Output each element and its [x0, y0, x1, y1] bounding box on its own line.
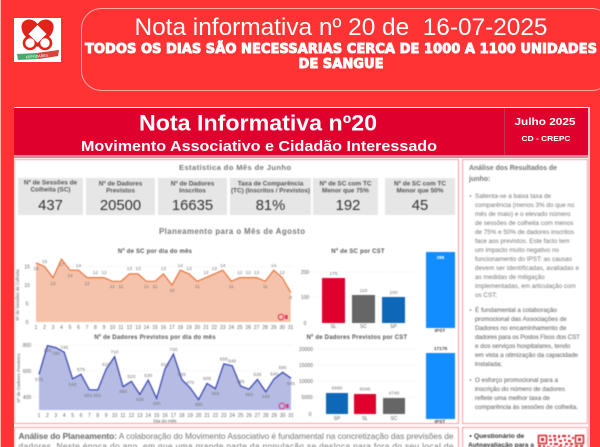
report sheet	[14, 107, 590, 447]
chart: expected donors per day: 800	[23, 343, 31, 349]
x axis: 10	[110, 325, 115, 331]
chart: expected donors per CST: 4740	[389, 390, 400, 396]
values: 505	[203, 376, 211, 382]
x axis: 15	[154, 413, 160, 419]
x axis: 24	[229, 325, 234, 331]
x axis: 11	[118, 325, 124, 331]
KPI: expected donors: 20500	[100, 198, 141, 214]
icon: marker	[278, 314, 288, 320]
chart: expected donors per CST: 0	[309, 412, 312, 418]
KPI: expected donors: Nº de Dadores	[99, 180, 143, 188]
panel: results analysis	[462, 160, 588, 424]
KPI: SC under 50%	[385, 178, 455, 215]
bullet 2: em vista a otimização da capacidade	[475, 352, 578, 359]
bullet 1: de 75% e 50% de dadores inscritos	[475, 229, 574, 236]
values: 14	[67, 273, 73, 279]
values: 13	[212, 266, 217, 272]
x axis: 1	[35, 325, 38, 331]
values: 710	[111, 350, 119, 356]
x axis: 3	[52, 325, 55, 331]
x axis: 5	[71, 413, 74, 419]
x axis: 12	[127, 325, 132, 331]
statistics heading: Estatística do Mês de Junho	[179, 163, 291, 172]
values: 11	[263, 284, 268, 290]
subtitle: TODOS OS DIAS SÃO NECESSARIAS CERCA DE 1000 A 1100 UNIDADES	[85, 40, 597, 57]
values: 12	[246, 270, 251, 276]
values: 11	[110, 284, 115, 290]
x axis: 20	[195, 325, 200, 331]
x axis: 2	[46, 413, 49, 419]
bullet 3: reflete uma melhor taxa de	[475, 395, 550, 402]
chart: SC per CST: 200	[301, 270, 309, 276]
values: 15	[42, 259, 47, 265]
icon: logo: FEPODABES	[26, 53, 49, 59]
planning heading: Planeamento para o Mês de Agosto	[159, 227, 305, 236]
bullet 1: face aos previstos. Este facto tem	[475, 238, 570, 245]
chart: SC per CST: 110	[360, 288, 368, 294]
values: 640	[228, 358, 237, 364]
chart: expected donors per day: Nº de Dadores Previstos por dia do mês	[94, 335, 216, 341]
chart: SC per day: Nº de Sessões de Colheita	[15, 269, 20, 321]
KPI: expected donors	[86, 178, 155, 215]
x axis: 25	[238, 413, 244, 419]
values: 535	[253, 372, 262, 378]
KPI: SC under 50%: Nº de SC com TC	[394, 180, 446, 188]
subtitle	[85, 40, 597, 72]
values: 14	[220, 263, 226, 269]
bullet 1: os CST;	[475, 292, 497, 299]
planning analysis text	[18, 431, 454, 447]
bullet 2: Dadores no encaminhamento de	[475, 325, 567, 332]
chart: SC per CST: SC	[360, 324, 367, 330]
x axis: 24	[229, 413, 235, 419]
bullet 1: Salienta-se a baixa taxa de	[475, 193, 551, 200]
x axis: 22	[213, 413, 218, 419]
x axis: 8	[94, 325, 97, 331]
chart: SC per CST: Nº de SC por CST	[331, 249, 385, 255]
values: 575	[77, 367, 85, 373]
date: Julho 2025	[514, 116, 576, 128]
x axis: 18	[179, 413, 185, 419]
x axis: 29	[271, 325, 277, 331]
x axis: 5	[69, 325, 72, 331]
chart: SC per day: 0	[26, 320, 29, 326]
KPI: SC under 75%: 192	[336, 198, 360, 214]
x axis: 27	[255, 413, 260, 419]
values: 11	[144, 284, 149, 290]
report subtitle: Movimento Associativo e Cidadão Interessado	[81, 138, 437, 155]
values: 440	[262, 394, 270, 400]
chart: SC per CST: 100	[301, 295, 309, 301]
values: 460	[245, 392, 253, 398]
chart: expected donors per day: 600	[23, 369, 31, 375]
bullet 3: inscrição do número de dadores	[475, 386, 565, 393]
x axis: 30	[279, 325, 285, 331]
x axis: 16	[162, 413, 168, 419]
bullet 1: devem ser identificadas, avaliadas e	[475, 265, 579, 272]
KPI: attendance rate: (TC) (Inscritos / Previstos)	[231, 188, 310, 194]
values: 14	[178, 263, 183, 269]
area and line	[36, 259, 291, 322]
chart: SC per day: Nº de SC por dia do mês	[118, 249, 193, 255]
x axis: 19	[187, 413, 193, 419]
questionnaire text	[468, 433, 534, 447]
x axis: 14	[145, 413, 151, 419]
values: 780	[52, 351, 60, 357]
x axis: 13	[135, 325, 141, 331]
x axis: 9	[103, 325, 106, 331]
bullet 1: um impacto muito negativo no	[475, 247, 560, 254]
values: 12	[93, 270, 98, 276]
chart: SC per CST: 176	[329, 271, 338, 277]
values: 730	[169, 347, 178, 353]
values: 14	[76, 263, 81, 269]
values: 8	[289, 295, 292, 301]
report header band	[14, 108, 588, 155]
values: 12	[280, 270, 285, 276]
values: 540	[69, 382, 77, 388]
values: 575	[35, 377, 43, 383]
values: 380	[195, 402, 203, 408]
x axis: 29	[271, 413, 277, 419]
area and line	[39, 346, 291, 410]
icon: logo	[14, 18, 61, 62]
x axis: 9	[105, 413, 108, 419]
header callout box	[82, 8, 600, 90]
x axis	[38, 413, 294, 419]
chart: expected donors per CST: IPST	[435, 419, 445, 425]
bullet 1: funcionamento do IPST: as causas	[475, 256, 572, 263]
KPI: sessions: 437	[38, 198, 63, 214]
values: 795	[43, 348, 52, 354]
values: 13	[127, 266, 132, 272]
bullet 3: comparência às sessões de colheita.	[475, 404, 578, 411]
x axis: 21	[204, 413, 210, 419]
KPI: SC under 75%: Menor que 75%	[322, 188, 369, 194]
x axis: 13	[137, 413, 143, 419]
values: 12	[50, 281, 56, 287]
bullet 1: as medidas de mitigação	[475, 274, 545, 281]
report title: Nota Informativa nº20	[139, 110, 377, 136]
x axis: 7	[88, 413, 91, 419]
values: 520	[127, 374, 136, 380]
KPI: SC under 75%	[313, 178, 378, 215]
values: 535	[178, 372, 186, 378]
values: 13	[161, 266, 166, 272]
KPI: attendance rate	[230, 178, 311, 215]
x axis: 27	[254, 325, 260, 331]
QR code	[538, 435, 584, 447]
values: 545	[287, 381, 295, 387]
x axis: 20	[196, 413, 202, 419]
x axis: 12	[129, 413, 134, 419]
x axis: 18	[178, 325, 183, 331]
chart: SC per day	[15, 249, 294, 331]
chart: expected donors per CST: SL	[362, 416, 368, 422]
values: 455	[84, 393, 92, 399]
x axis: 28	[263, 413, 269, 419]
x axis: 26	[246, 325, 251, 331]
bullet 3: O esforço promocional para a	[475, 377, 558, 384]
KPI: registered donors: Inscritos	[179, 188, 206, 194]
questionnaire text: Questionário de	[474, 433, 525, 440]
x axis: 26	[246, 413, 252, 419]
chart: SC per day: 10	[24, 283, 30, 289]
x axis: 23	[220, 325, 226, 331]
x axis: 16	[161, 325, 166, 331]
values: 13	[135, 266, 141, 272]
values: 480	[119, 389, 127, 395]
values: 11	[153, 284, 158, 290]
x axis: 14	[144, 325, 149, 331]
values: 11	[119, 284, 124, 290]
values: 12	[84, 281, 90, 287]
panel: planning analysis	[14, 428, 458, 447]
chart: SC per CST	[301, 249, 455, 334]
x axis: 3	[54, 413, 57, 419]
values: 615	[161, 362, 169, 368]
chart: expected donors per CST: Nº de Dadores Previstos por CST	[307, 335, 408, 341]
chart: expected donors per day: Nº de Dadores Previstos	[16, 353, 21, 403]
values: 12	[237, 270, 243, 276]
chart: SC per CST: 0	[304, 321, 307, 327]
chart: SC per day: 5	[26, 302, 29, 308]
values: 11	[195, 284, 200, 290]
icon: marker	[279, 403, 289, 409]
bullet 2: promocional das Associações de	[475, 316, 567, 323]
x axis: 17	[169, 325, 175, 331]
subtitle: DE SANGUE	[298, 56, 384, 72]
x axis: 30	[280, 413, 286, 419]
chart: expected donors per CST: 15000	[299, 363, 313, 369]
x axis: 4	[63, 413, 66, 419]
values: 11	[229, 284, 234, 290]
values: 485	[237, 379, 245, 385]
KPI: sessions: Colheita (SC)	[30, 186, 71, 194]
chart: SC per CST: IPST	[435, 328, 445, 334]
values: 465	[211, 391, 220, 397]
x axis: 6	[77, 325, 80, 331]
bullet 3	[470, 377, 578, 411]
KPI: registered donors: Nº de Dadores	[171, 180, 215, 188]
x axis: 1	[38, 413, 41, 419]
values: 455	[93, 393, 101, 399]
bullet 2: instalada;	[475, 361, 502, 368]
chart: expected donors per day: Dia do mês	[153, 418, 177, 424]
chart: expected donors per CST: 10000	[299, 379, 313, 385]
KPI: attendance rate: Taxa de Comparência	[238, 180, 304, 188]
x axis: 11	[120, 413, 126, 419]
x axis: 2	[43, 325, 46, 331]
bullet 1: implementadas, em articulação com	[475, 283, 576, 290]
values: 16	[33, 266, 39, 272]
values: 655	[220, 356, 228, 362]
planning analysis text: Análise do Planeamento: A colaboração do Movimento Associativo é fundamental na concretização das previsões de	[18, 431, 454, 441]
analysis heading: junho:	[468, 176, 490, 183]
KPI: registered donors	[158, 178, 227, 215]
bullet 1: comparência (menos 3% do que no	[475, 202, 575, 209]
chart: expected donors per CST	[299, 335, 455, 425]
x axis: 6	[80, 413, 83, 419]
bullet 2	[470, 305, 580, 368]
values: 12	[254, 270, 260, 276]
panel: questionnaire	[462, 428, 588, 447]
values: 10	[169, 288, 175, 294]
KPI: registered donors: 16635	[172, 198, 213, 214]
x axis: 31	[288, 413, 294, 419]
bullet 2: É fundamental a colaboração	[475, 305, 557, 314]
KPI: attendance rate: 81%	[256, 198, 285, 214]
values: 590	[279, 365, 287, 371]
bullet 1: mês de maio) e o elevado número	[475, 211, 571, 218]
x axis: 28	[262, 325, 268, 331]
values: 390	[153, 401, 161, 407]
x axis: 25	[237, 325, 243, 331]
bullet 1: de sessões de colheita com menos	[475, 220, 573, 227]
chart: SC per day: 15	[24, 264, 30, 270]
bullet 1	[470, 193, 579, 299]
chart: SC per CST: SP	[390, 324, 397, 330]
KPI: SC under 50%: 45	[412, 198, 428, 214]
chart: expected donors per CST: SP	[334, 416, 341, 422]
KPI: SC under 50%: Menor que 50%	[397, 188, 444, 194]
x axis: 7	[86, 325, 89, 331]
values: 12	[203, 270, 209, 276]
values	[33, 259, 292, 301]
x axis: 10	[112, 413, 118, 419]
chart: expected donors per CST: 20000	[299, 347, 313, 353]
chart: expected donors per CST: 5000	[301, 395, 313, 401]
values: 470	[186, 380, 195, 386]
x axis: 17	[171, 413, 176, 419]
chart: SC per CST: 100	[389, 290, 398, 296]
chart: expected donors per day: 400	[23, 395, 31, 401]
bullet 2: e dos serviços hospitalares, tendo	[475, 343, 571, 350]
x axis: 23	[221, 413, 227, 419]
analysis heading: Análise dos Resultados de	[469, 165, 557, 172]
x axis: 4	[60, 325, 63, 331]
KPI: sessions	[18, 178, 83, 215]
x axis: 8	[96, 413, 99, 419]
KPI: SC under 75%: Nº de SC com TC	[319, 180, 372, 188]
x axis: 19	[186, 325, 192, 331]
chart: SC per CST: 386	[437, 255, 445, 260]
x axis: 15	[152, 325, 158, 331]
chart: SC per CST: SL	[330, 324, 337, 330]
department: CD - CREPC	[522, 134, 571, 143]
bullet 2: dadores para os Postos Fixos dos CST	[475, 334, 580, 341]
KPI: expected donors: Previstos	[106, 188, 135, 194]
chart: expected donors per CST: SC	[391, 416, 398, 422]
values: 530	[144, 373, 153, 379]
values: 17	[59, 262, 64, 268]
values	[35, 345, 295, 408]
KPI: sessions: Nº de Sessões de	[24, 180, 78, 186]
values: 615	[102, 362, 111, 368]
x axis: 21	[203, 325, 209, 331]
chart: expected donors per day	[16, 335, 295, 424]
chart: expected donors per CST: 17175	[434, 346, 447, 352]
panel: statistics and planning	[14, 160, 458, 425]
values: 12	[101, 270, 107, 276]
analysis heading	[468, 165, 557, 183]
title: Nota informativa nº 20 de 16-07-2025	[134, 14, 548, 41]
values: 540	[270, 372, 279, 378]
values: 420	[136, 397, 144, 403]
values: 745	[60, 345, 69, 351]
values: 14	[271, 263, 277, 269]
chart: expected donors per CST: 6046	[360, 386, 371, 392]
x axis	[35, 325, 294, 331]
x axis: 22	[212, 325, 217, 331]
chart: expected donors per CST: 6590	[332, 386, 343, 392]
values: 13	[186, 266, 192, 272]
x axis: 31	[288, 325, 294, 331]
